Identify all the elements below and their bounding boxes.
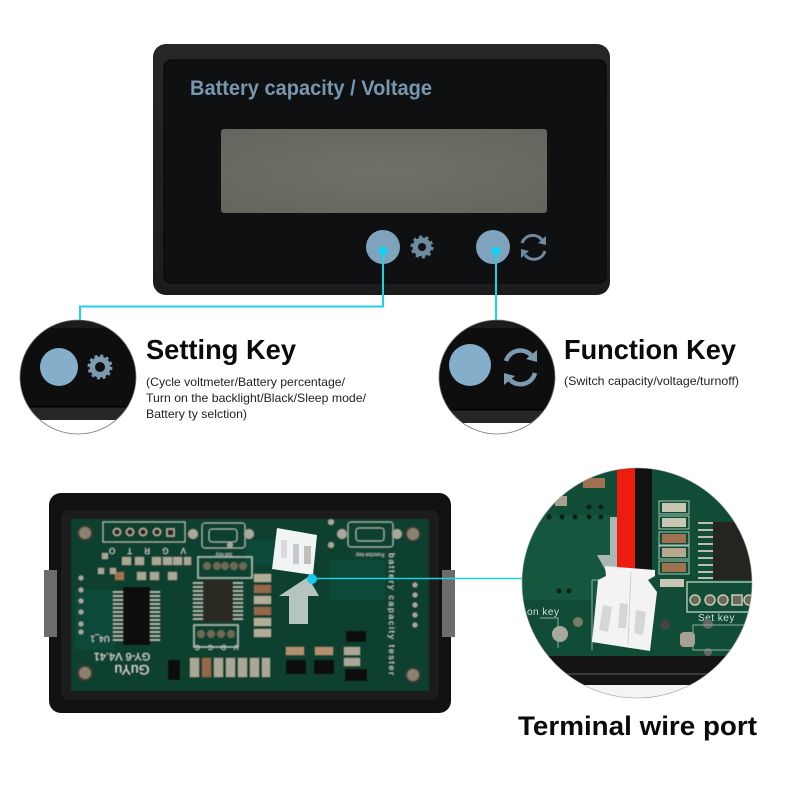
silk text: header: V G R T O <box>104 546 186 555</box>
panel: function key magnifier <box>438 320 556 435</box>
setting button close-up <box>40 348 78 386</box>
text: function key description: (Switch capacity/voltage/turnoff) <box>564 374 739 388</box>
pad header upper <box>198 557 252 578</box>
function button close-up <box>449 344 491 386</box>
icon: refresh close-up <box>504 350 537 385</box>
silk text: keys <box>527 607 735 624</box>
circuit board <box>71 519 429 691</box>
silk text: version: GuYu <box>114 662 150 678</box>
gray arrow on board <box>597 517 617 570</box>
heading: function key: Function Key <box>564 334 736 365</box>
text: setting key description: (Cycle voltmeter/Battery percentage/ <box>146 375 346 389</box>
heading: setting key: Setting Key <box>146 334 296 365</box>
heading: terminal wire port: Terminal wire port <box>518 711 757 741</box>
silk text: keys: on key <box>527 607 559 618</box>
silk text: version: U4_1 <box>90 634 110 643</box>
pad header lower <box>194 625 238 647</box>
heading: device label: Battery capacity / Voltage <box>190 77 432 100</box>
top SMD <box>555 478 605 506</box>
panel: terminal port magnifier <box>520 466 757 701</box>
silk text: board name: battery capacity tester <box>387 553 397 675</box>
silver pads <box>188 519 402 548</box>
callout: terminal port line <box>307 574 522 584</box>
text: setting key description <box>146 375 367 421</box>
callout: setting key line <box>80 246 388 320</box>
pin header pads <box>103 522 185 542</box>
left edge pads <box>78 576 418 634</box>
black case edge <box>548 656 726 698</box>
silver solder pads <box>552 617 713 656</box>
function button <box>476 230 510 264</box>
silk text: keys: Set key <box>215 551 232 557</box>
switch outlines <box>202 522 393 548</box>
side clips inner <box>44 570 455 637</box>
setting button <box>366 230 400 264</box>
white plug <box>592 566 657 651</box>
icon: gear <box>412 237 432 257</box>
callout: function key line <box>492 246 500 320</box>
chip middle <box>193 580 243 622</box>
white connector <box>272 528 317 575</box>
IC chip <box>698 522 755 580</box>
chip U4 <box>113 587 160 645</box>
wires <box>617 466 652 574</box>
icon: gear close-up <box>89 356 111 378</box>
panel: front of battery meter <box>153 44 610 295</box>
pad row <box>687 582 757 612</box>
arrow: up to connector <box>279 577 319 624</box>
board pads <box>546 504 604 594</box>
silk text: VDCG: V D C G <box>191 643 239 650</box>
board outlines <box>540 580 753 650</box>
capacitor stack <box>659 501 689 587</box>
silk text: version: GY-6 V4.41 <box>94 650 150 662</box>
side clips <box>44 570 455 637</box>
panel: back of meter with circuit board <box>44 493 455 713</box>
LCD screen <box>221 129 547 213</box>
lighter board region <box>520 515 615 600</box>
trace shading <box>75 540 385 650</box>
capacitor column <box>254 574 271 637</box>
silk text: keys: Set key <box>698 613 735 624</box>
icon: refresh arrows <box>521 235 546 259</box>
panel: setting key magnifier <box>19 320 137 434</box>
silk text: version <box>90 634 150 678</box>
text: setting key description: Battery ty selction) <box>146 407 247 421</box>
text: setting key description: Turn on the backlight/Black/Sleep mode/ <box>146 391 367 405</box>
mounting screws <box>78 526 420 682</box>
bottom component row <box>168 631 367 681</box>
small SMD row <box>98 553 191 580</box>
circuit board: Function key <box>355 551 384 557</box>
